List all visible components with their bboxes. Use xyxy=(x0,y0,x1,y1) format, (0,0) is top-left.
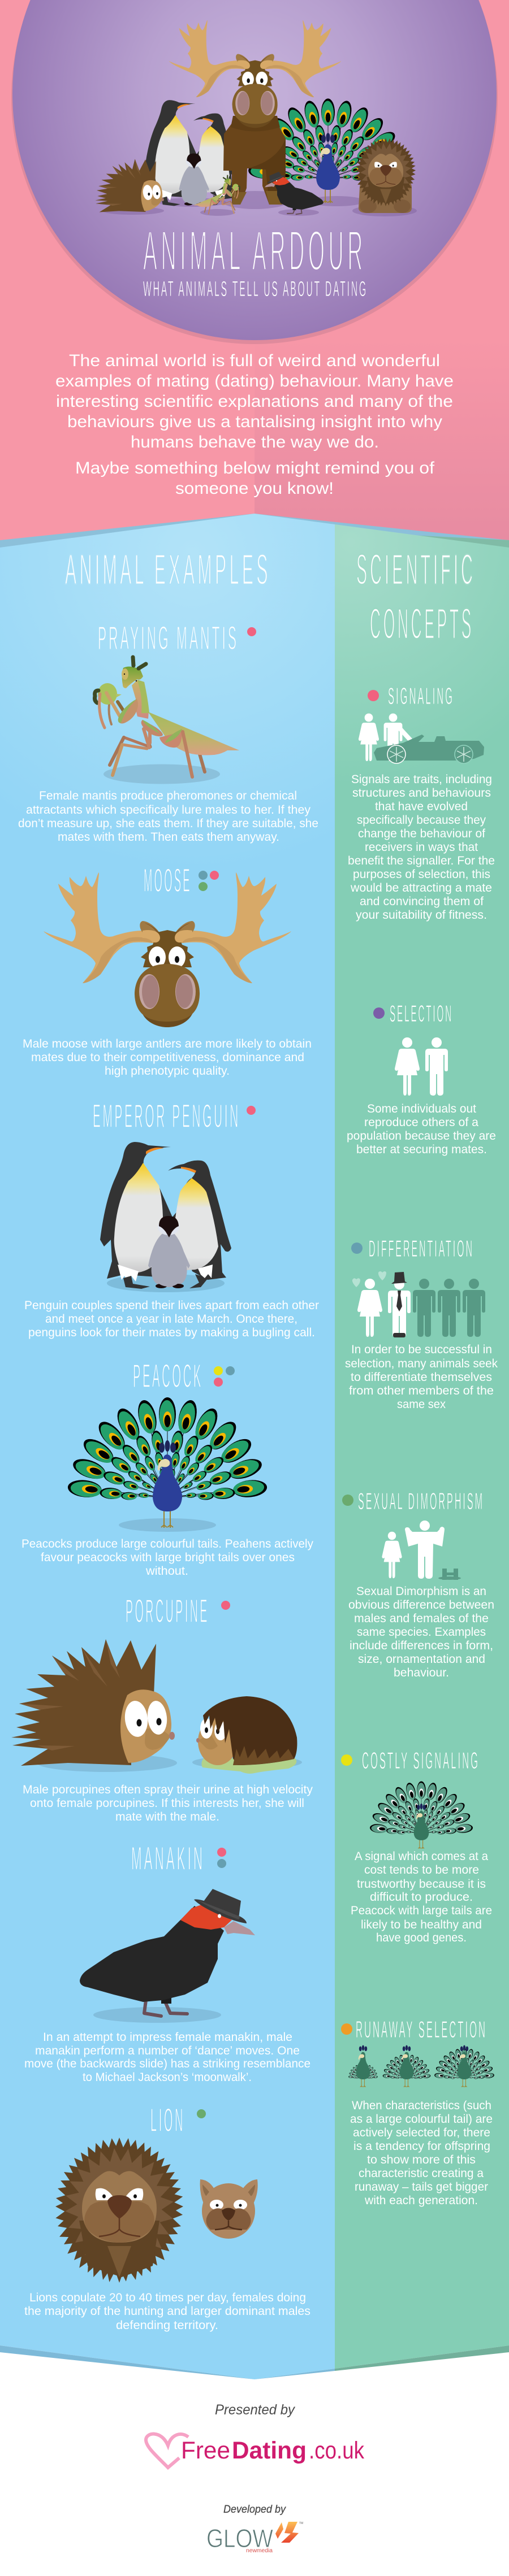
description: Lions copulate 20 to 40 times per day, females doing xyxy=(29,2291,306,2304)
description: Male porcupines often spray their urine at high velocity xyxy=(23,1783,313,1796)
description: difficult to produce. xyxy=(370,1890,473,1904)
section: lion xyxy=(24,2102,310,2332)
hero circle xyxy=(12,0,497,340)
hero moose xyxy=(169,20,341,205)
hero bird xyxy=(265,172,323,214)
section: emperor penguin xyxy=(24,1098,319,1339)
description: and convincing them of xyxy=(360,894,484,908)
section: praying mantis xyxy=(18,620,318,844)
shade band: top of blue panel xyxy=(0,514,509,551)
description: would be attracting a mate xyxy=(350,881,492,894)
description: Male moose with large antlers are more likely to obtain xyxy=(23,1037,312,1050)
section: porcupine xyxy=(11,1593,313,1823)
shade band: bottom right xyxy=(335,2345,509,2371)
hero ground shadows xyxy=(102,191,417,216)
background: pink header xyxy=(0,0,509,565)
description xyxy=(350,2099,493,2207)
shadow xyxy=(93,2007,221,2023)
concept dot xyxy=(247,627,256,636)
concept dot xyxy=(247,1106,256,1115)
description: better at securing mates. xyxy=(356,1143,487,1156)
icon: woman and man xyxy=(395,1037,448,1096)
description xyxy=(348,1584,494,1679)
shade band: bottom left xyxy=(0,2345,255,2379)
description: Penguin couples spend their lives apart from each other xyxy=(24,1298,319,1312)
description xyxy=(18,789,318,844)
section: peacock: PEACOCK xyxy=(133,1358,203,1395)
concept dots xyxy=(217,1848,226,1868)
hero animal group xyxy=(95,20,420,216)
description: specifically because they xyxy=(357,813,486,827)
logo flame xyxy=(275,2522,299,2543)
description: Peacock with large tails are xyxy=(351,1904,492,1917)
section: peacock xyxy=(21,1358,313,1578)
penguin family illustration xyxy=(100,1142,231,1289)
intro text: humans behave the way we do. xyxy=(131,433,379,451)
description: Peacocks produce large colourful tails. Peahens actively xyxy=(21,1537,313,1550)
panel: scientific concepts background xyxy=(335,524,509,2369)
description xyxy=(347,1102,496,1156)
concept dot xyxy=(341,1754,352,1766)
male porcupine xyxy=(11,1639,175,1766)
logo: FreeDating.co.uk xyxy=(146,2434,364,2468)
concept: runaway selection xyxy=(341,2016,494,2207)
description: move (the backwards slide) has a striking resemblance xyxy=(24,2057,310,2070)
description: to Michael Jackson’s ‘moonwalk’. xyxy=(83,2070,252,2084)
description: population because they are xyxy=(347,1129,496,1143)
description: without. xyxy=(145,1564,188,1578)
hero mantis xyxy=(193,176,240,214)
male lion xyxy=(46,2130,192,2291)
panel: animal examples background xyxy=(0,514,335,2379)
description: When characteristics (such xyxy=(352,2099,491,2112)
background: darker right half of pink panel xyxy=(255,339,509,548)
description: characteristic creating a xyxy=(359,2166,484,2180)
logo: Glow New Media xyxy=(206,2522,303,2554)
footer: developed by: Developed by xyxy=(223,2504,286,2516)
intro text: The animal world is full of weird and wonderful xyxy=(69,351,440,370)
description: is a tendency for offspring xyxy=(353,2139,490,2153)
description: mates with them. Then eats them anyway. xyxy=(58,830,279,844)
description: A signal which comes at a xyxy=(355,1849,488,1863)
description: structures and behaviours xyxy=(352,786,491,800)
female lion xyxy=(200,2179,258,2239)
concept dot xyxy=(368,690,379,701)
description xyxy=(21,1537,313,1578)
icon: heart xyxy=(146,2434,188,2468)
logo text: .co.uk: .co.uk xyxy=(309,2437,364,2464)
intro text xyxy=(55,351,454,498)
trademark: TM xyxy=(299,2522,303,2525)
logo wordmark: GLOW xyxy=(206,2524,273,2553)
description: In order to be successful in xyxy=(351,1343,492,1356)
description: to differentiate themselves xyxy=(351,1370,492,1384)
section: emperor penguin: EMPEROR PENGUIN xyxy=(93,1098,240,1135)
shadow xyxy=(119,1518,216,1532)
description: mate with the male. xyxy=(115,1810,219,1823)
shadow xyxy=(107,1274,225,1292)
description: purposes of selection, this xyxy=(353,867,490,881)
description xyxy=(348,772,495,922)
description: actively selected for, there xyxy=(353,2126,490,2139)
concept: sexual dimorphism xyxy=(342,1488,494,1679)
manakin bird illustration xyxy=(80,1889,255,2016)
section: praying mantis: PRAYING MANTIS xyxy=(98,620,239,657)
description xyxy=(24,2030,310,2084)
description xyxy=(23,1037,312,1078)
description: to show more of this xyxy=(367,2153,476,2166)
description xyxy=(345,1343,498,1411)
hero peacock body front xyxy=(316,133,340,203)
description: include differences in form, xyxy=(350,1639,493,1652)
footer: presented by: Presented by xyxy=(215,2402,295,2418)
description: In an attempt to impress female manakin, male xyxy=(43,2030,292,2044)
description: that have evolved xyxy=(375,800,468,813)
concept: signaling xyxy=(348,683,495,922)
description: penguins look for their mates by making a bugling call. xyxy=(28,1326,315,1339)
section: lion: LION xyxy=(150,2102,185,2139)
description: onto female porcupines. If this interests her, she will xyxy=(30,1796,304,1810)
intro text: interesting scientific explanations and many of the xyxy=(56,392,453,411)
description: same sex xyxy=(397,1397,446,1411)
icon: woman, strong man, dumbbell xyxy=(382,1521,461,1580)
description: manakin perform a number of ‘dance’ moves. One xyxy=(35,2044,300,2057)
icon: people with top hat xyxy=(352,1271,485,1337)
description: and meet once a year in late March. Once there, xyxy=(45,1312,297,1326)
description: behaviour. xyxy=(394,1666,449,1679)
intro text: behaviours give us a tantalising insight into why xyxy=(67,412,442,431)
mantis illustration xyxy=(95,657,239,777)
description: obvious difference between xyxy=(348,1598,494,1611)
description: runaway – tails get bigger xyxy=(355,2180,488,2193)
concept dot xyxy=(197,2109,206,2118)
hero lion xyxy=(351,134,420,213)
shade band: top of green panel xyxy=(335,531,509,551)
description: cost tends to be more xyxy=(364,1863,479,1876)
moose illustration xyxy=(44,872,291,1027)
concept: differentiation xyxy=(345,1235,498,1411)
section: manakin xyxy=(24,1840,310,2084)
hero peacock xyxy=(248,98,408,203)
description: reproduce others of a xyxy=(364,1115,478,1129)
hero circle shadow xyxy=(11,0,498,344)
description: trustworthy because it is xyxy=(357,1877,486,1891)
description xyxy=(24,1298,319,1339)
description: Signals are traits, including xyxy=(351,772,492,786)
hero porcupine xyxy=(95,159,164,212)
concept: costly signaling xyxy=(341,1747,492,1944)
intro text: someone you know! xyxy=(175,479,334,498)
shade band: bottom centre xyxy=(255,2369,335,2379)
icon: couple and sports car xyxy=(359,714,484,763)
description: size, ornamentation and xyxy=(358,1652,485,1666)
concept dots xyxy=(199,871,219,891)
concept dot xyxy=(373,1007,385,1019)
description: likely to be healthy and xyxy=(361,1918,482,1931)
male shadow xyxy=(37,1754,177,1772)
female porcupine xyxy=(192,1696,302,1774)
section: moose xyxy=(23,862,312,1078)
peacock illustration xyxy=(67,1397,268,1528)
intro text: examples of mating (dating) behaviour. Many have xyxy=(55,372,454,390)
description: from other members of the xyxy=(349,1384,494,1397)
logo text: Free: Free xyxy=(181,2437,230,2464)
description: high phenotypic quality. xyxy=(105,1064,230,1078)
shadow xyxy=(103,764,220,784)
concept dot xyxy=(221,1601,230,1610)
description: selection, many animals seek xyxy=(345,1357,498,1370)
icon: peacock silhouette xyxy=(369,1781,473,1849)
description: your suitability of fitness. xyxy=(356,908,487,922)
description: Female mantis produce pheromones or chemical xyxy=(39,789,297,802)
description: defending territory. xyxy=(116,2318,218,2332)
description: same species. Examples xyxy=(357,1625,486,1639)
icon: three peacocks of growing tail size xyxy=(348,2045,494,2087)
logo tagline: newmedia xyxy=(246,2548,273,2554)
section: manakin: MANAKIN xyxy=(131,1840,205,1877)
description: as a large colourful tail) are xyxy=(350,2112,493,2126)
description xyxy=(24,2291,310,2332)
concept dot xyxy=(341,2023,352,2035)
description: have good genes. xyxy=(376,1931,467,1944)
section: moose: MOOSE xyxy=(144,862,192,899)
hero penguins xyxy=(144,100,239,206)
concept dot xyxy=(342,1495,353,1506)
description: benefit the signaller. For the xyxy=(348,854,495,867)
description: attractants which specifically lure males to her. If they xyxy=(26,803,310,816)
description: with each generation. xyxy=(364,2193,478,2207)
description: males and females of the xyxy=(354,1611,489,1625)
description xyxy=(351,1849,492,1944)
description: change the behaviour of xyxy=(358,827,485,840)
description: Some individuals out xyxy=(367,1102,476,1115)
concept dots xyxy=(214,1366,235,1387)
description: don’t measure up, she eats them. If they are suitable, she xyxy=(18,816,318,830)
description xyxy=(23,1783,313,1823)
concept: selection xyxy=(347,1000,496,1156)
section: porcupine: PORCUPINE xyxy=(126,1593,209,1630)
logo text: Dating: Dating xyxy=(232,2437,307,2464)
description: mates due to their competitiveness, dominance and xyxy=(31,1050,304,1064)
description: receivers in ways that xyxy=(365,840,478,854)
description: Sexual Dimorphism is an xyxy=(356,1584,486,1598)
description: the majority of the hunting and larger dominant males xyxy=(24,2304,310,2318)
intro text: Maybe something below might remind you of xyxy=(75,459,435,477)
description: favour peacocks with large bright tails over ones xyxy=(41,1550,295,1564)
concept dot xyxy=(351,1243,363,1254)
